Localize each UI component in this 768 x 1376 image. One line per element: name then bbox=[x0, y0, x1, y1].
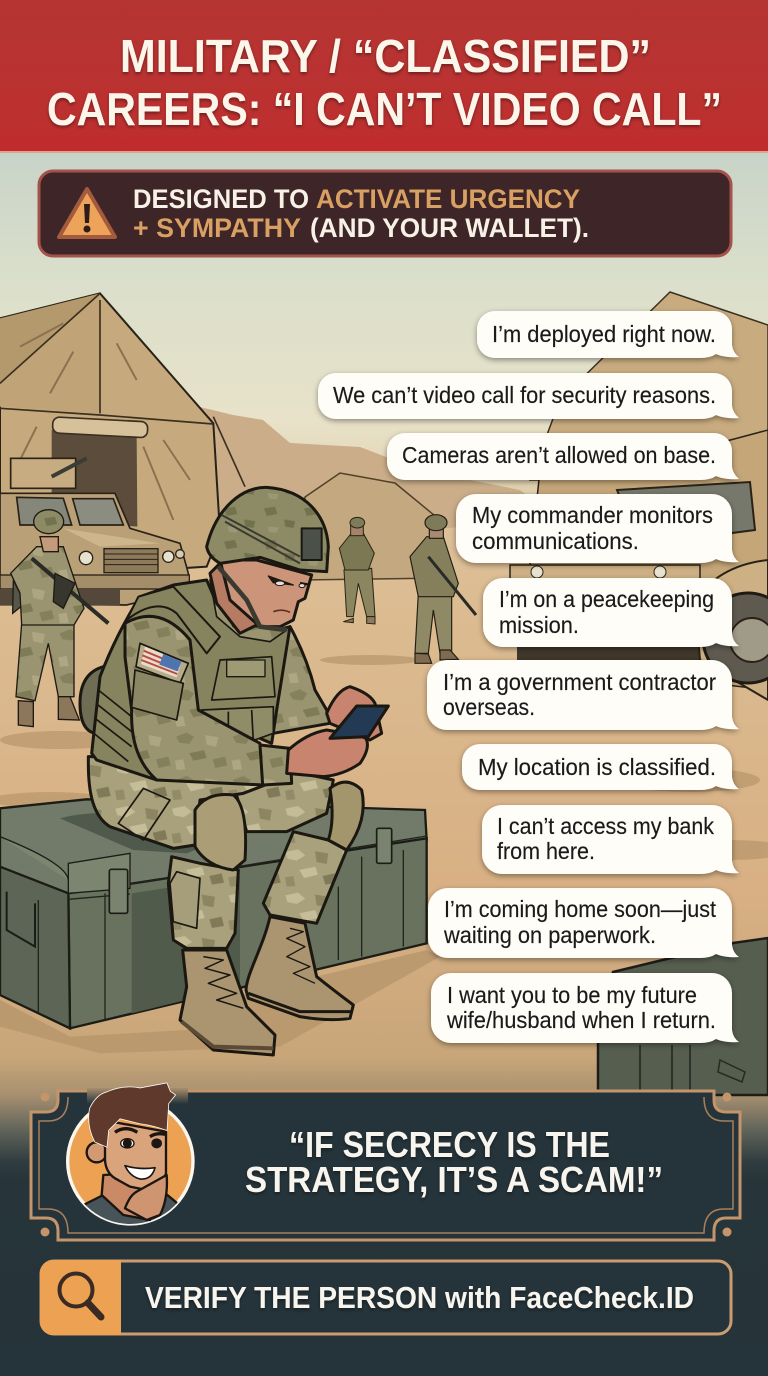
quote text bbox=[245, 1124, 663, 1200]
near thigh bbox=[88, 757, 287, 848]
quote panel bbox=[31, 1083, 740, 1240]
bubble 3: Cameras aren’t allowed on base. bbox=[402, 442, 716, 468]
far boot bbox=[246, 917, 353, 1020]
small centre tent bbox=[300, 473, 447, 580]
warning text: ACTIVATE URGENCY bbox=[316, 184, 580, 214]
bubble 4: communications. bbox=[472, 528, 639, 554]
bubble 9 bbox=[428, 888, 739, 958]
bubble 10: I want you to be my future bbox=[447, 982, 697, 1008]
scene: camp background bbox=[0, 292, 768, 1095]
phone bbox=[330, 706, 388, 738]
bubble 8 bbox=[482, 805, 739, 874]
bubble 8: I can’t access my bank bbox=[497, 813, 714, 839]
warning text: (AND YOUR WALLET). bbox=[310, 213, 589, 243]
title banner bbox=[0, 0, 768, 153]
warning text: + SYMPATHY bbox=[133, 213, 301, 243]
call to action bar bbox=[40, 1260, 731, 1335]
title text: MILITARY / “CLASSIFIED” bbox=[120, 30, 651, 82]
legs and boots bbox=[88, 757, 363, 1055]
bubble 6: overseas. bbox=[443, 694, 535, 720]
bubble 2 bbox=[318, 373, 739, 419]
chat bubbles bbox=[318, 311, 739, 1043]
title text bbox=[47, 30, 722, 135]
back pouch bbox=[80, 667, 103, 733]
bubble 4 bbox=[456, 494, 739, 563]
left truck bbox=[0, 458, 189, 606]
bubble 10: wife/husband when I return. bbox=[446, 1007, 716, 1033]
ammo crate bbox=[0, 799, 440, 1053]
thigh far bbox=[233, 770, 333, 832]
shoulder strap bbox=[127, 587, 220, 653]
quote text: STRATEGY, IT’S A SCAM!” bbox=[245, 1159, 663, 1200]
quote text: “IF SECRECY IS THE bbox=[289, 1124, 610, 1165]
near arm bbox=[125, 616, 263, 785]
soldier: right background bbox=[410, 515, 476, 663]
far shin bbox=[263, 832, 347, 923]
face bbox=[220, 560, 312, 627]
vest bbox=[92, 580, 290, 780]
left tent bbox=[0, 293, 245, 580]
cta text: VERIFY THE PERSON with FaceCheck.ID bbox=[145, 1280, 694, 1315]
near boot bbox=[180, 950, 275, 1055]
bubble 9: waiting on paperwork. bbox=[443, 922, 656, 948]
soldier: left background bbox=[11, 510, 108, 727]
soldier: centre background bbox=[339, 517, 375, 624]
bubble 5: mission. bbox=[499, 612, 579, 638]
ornate frame bbox=[31, 1088, 740, 1240]
arm pocket bbox=[132, 670, 183, 720]
bubble 3 bbox=[387, 433, 739, 480]
bubble 7: My location is classified. bbox=[478, 754, 716, 780]
near kneepad bbox=[195, 794, 246, 870]
upper hand bbox=[327, 687, 382, 740]
main figure: soldier seated on crate bbox=[0, 487, 440, 1055]
bubble 5 bbox=[483, 578, 739, 647]
bubble 6: I’m a government contractor bbox=[443, 669, 716, 695]
bubble 8: from here. bbox=[497, 838, 595, 864]
bubble 7 bbox=[462, 744, 739, 790]
warning text bbox=[133, 184, 589, 243]
helmet bbox=[207, 487, 328, 572]
ground marks bbox=[0, 655, 768, 860]
bubble 1: I’m deployed right now. bbox=[492, 321, 716, 347]
warning text: DESIGNED TO bbox=[133, 184, 309, 214]
bubble 6 bbox=[427, 660, 739, 730]
right tent bbox=[530, 292, 768, 480]
right crate bbox=[598, 938, 768, 1095]
neck bbox=[210, 563, 260, 633]
far kneepad bbox=[328, 782, 363, 850]
lower hand bbox=[287, 730, 367, 777]
flag patch bbox=[136, 643, 188, 683]
chin strap bbox=[218, 567, 287, 630]
bubble 5: I’m on a peacekeeping bbox=[499, 586, 714, 612]
bubble 9: I’m coming home soon—just bbox=[444, 896, 717, 922]
icon: warning triangle bbox=[59, 189, 115, 237]
icon: magnifying glass bbox=[60, 1274, 101, 1317]
bubble 4: My commander monitors bbox=[472, 502, 713, 528]
bubble 10 bbox=[431, 973, 739, 1043]
far arm bbox=[270, 627, 330, 733]
icon: cartoon presenter avatar bbox=[68, 1083, 193, 1228]
chest rig bbox=[212, 657, 275, 700]
near shin bbox=[168, 857, 238, 948]
bubble 2: We can’t video call for security reasons. bbox=[333, 382, 716, 408]
distant hills bbox=[0, 407, 560, 560]
upper body bbox=[80, 487, 388, 785]
warning callout bbox=[39, 171, 731, 256]
bubble 1 bbox=[477, 311, 739, 358]
right truck bbox=[510, 430, 768, 700]
